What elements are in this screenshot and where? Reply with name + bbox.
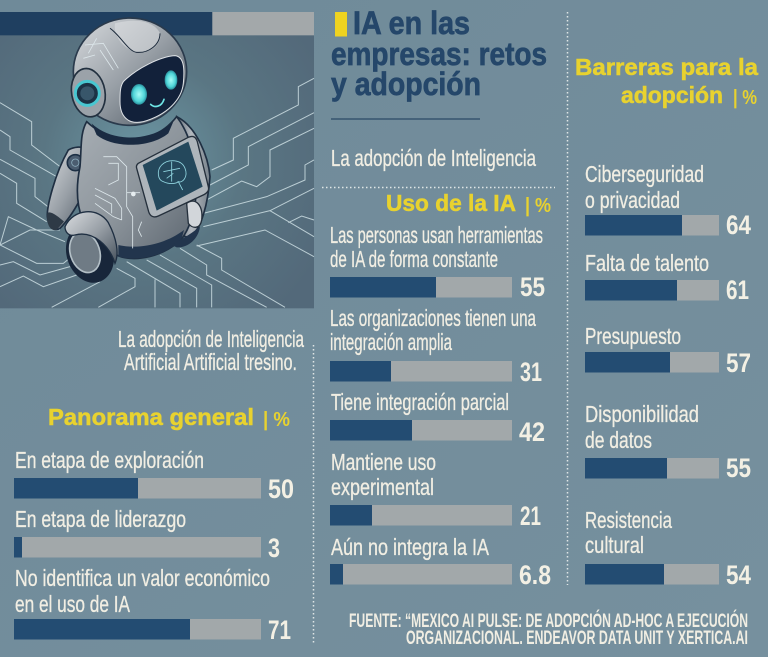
neck xyxy=(92,122,173,145)
bar: liderazgo: 3 xyxy=(268,533,280,563)
icon: circuit lines xyxy=(0,78,314,307)
bar: liderazgo: En etapa de liderazgo xyxy=(15,506,186,532)
bar: resistencia: cultural xyxy=(585,532,644,558)
heading: barreras para la adopcion: Barreras para la xyxy=(575,54,758,80)
bar: uso experimental: Mantiene uso xyxy=(331,449,436,475)
head xyxy=(73,18,187,125)
bar: integracion parcial xyxy=(330,389,545,447)
heading: panorama general: | % xyxy=(263,409,290,431)
heading: uso de la IA: Uso de la IA xyxy=(386,190,516,216)
wheel xyxy=(59,218,121,289)
panel: robot illustration xyxy=(0,12,314,308)
icon: brain xyxy=(158,161,186,190)
bar: uso constante: Las personas usan herramientas xyxy=(330,222,543,248)
bar: uso constante: de IA de forma constante xyxy=(330,246,498,272)
intro text: center: La adopción de Inteligencia xyxy=(331,145,537,171)
bar: talento xyxy=(585,250,749,305)
bar: integracion parcial: Tiene integración parcial xyxy=(331,389,509,415)
bar: integracion amplia: Las organizaciones tienen una xyxy=(330,305,537,331)
right arm xyxy=(172,117,210,237)
bar: no integra: Aún no integra la IA xyxy=(331,534,489,560)
intro text: left: La adopción de Inteligencia xyxy=(118,326,305,352)
bar: datos: 55 xyxy=(726,453,751,483)
intro text: left: Artificial Artificial tresino. xyxy=(124,349,297,375)
bar: talento: Falta de talento xyxy=(585,250,709,276)
heading: panorama general: Panorama general xyxy=(48,404,254,430)
bar: resistencia: 54 xyxy=(726,560,751,590)
bar: integracion amplia xyxy=(330,305,542,387)
bar: uso experimental: experimental xyxy=(331,474,434,500)
bar: datos: de datos xyxy=(585,427,652,453)
bar: resistencia xyxy=(585,507,751,590)
bar: presupuesto xyxy=(585,323,751,378)
bar: integracion amplia: integración amplia xyxy=(330,329,453,355)
title: empresas: retos xyxy=(331,36,547,72)
bar: valor economico: No identifica un valor económico xyxy=(15,565,270,591)
bar: valor economico: 71 xyxy=(268,615,291,645)
left arm xyxy=(47,147,93,229)
bar: no integra xyxy=(330,534,551,590)
intro text: left xyxy=(118,326,305,375)
bar: exploracion: En etapa de exploración xyxy=(15,447,204,473)
bar: uso constante: 55 xyxy=(520,272,545,302)
bar: datos: Disponibilidad xyxy=(585,401,699,427)
heading: barreras para la adopcion: | % xyxy=(733,87,757,109)
bar: uso experimental: 21 xyxy=(520,501,541,531)
bar: uso constante xyxy=(330,222,545,302)
bar: no integra: 6.8 xyxy=(519,560,551,590)
bar: valor economico xyxy=(14,565,291,645)
bar: presupuesto: 57 xyxy=(726,348,751,378)
title: y adopción xyxy=(331,66,481,102)
bar: liderazgo xyxy=(14,506,280,563)
visor xyxy=(120,56,184,122)
bar: ciberseguridad xyxy=(585,161,751,240)
bar: ciberseguridad: 64 xyxy=(726,210,751,240)
smile xyxy=(151,99,164,106)
bar: ciberseguridad: o privacidad xyxy=(585,187,680,213)
heading: barreras para la adopcion xyxy=(575,54,758,109)
title: IA en las xyxy=(353,5,470,41)
bar: integracion amplia: 31 xyxy=(520,357,542,387)
heading: barreras para la adopcion: adopción xyxy=(621,82,723,108)
panel: barreras bars xyxy=(585,161,751,590)
bar: ciberseguridad: Ciberseguridad xyxy=(585,161,704,187)
title xyxy=(331,5,547,102)
bar: integracion parcial: 42 xyxy=(519,417,545,447)
bar: resistencia: Resistencia xyxy=(585,507,673,533)
tablet xyxy=(136,136,209,217)
icon: robot xyxy=(47,18,210,289)
panel: uso de la IA bars xyxy=(330,222,551,590)
bar: valor economico: en el uso de IA xyxy=(15,591,130,617)
bar: exploracion: 50 xyxy=(268,474,294,504)
right hand xyxy=(187,201,202,227)
bar: talento: 61 xyxy=(726,275,749,305)
bar: uso experimental xyxy=(330,449,541,531)
bar: presupuesto: Presupuesto xyxy=(585,323,681,349)
bar: datos xyxy=(585,401,751,483)
chest circuits xyxy=(95,157,142,248)
top bar xyxy=(0,12,314,35)
torso xyxy=(77,117,196,259)
source xyxy=(349,610,748,649)
icon: yellow marker xyxy=(335,12,347,36)
eyes xyxy=(131,84,147,105)
bar: exploracion xyxy=(14,447,294,504)
ear xyxy=(68,66,109,120)
heading: uso de la IA: | % xyxy=(525,195,551,217)
panel: panorama general bars xyxy=(14,447,294,645)
